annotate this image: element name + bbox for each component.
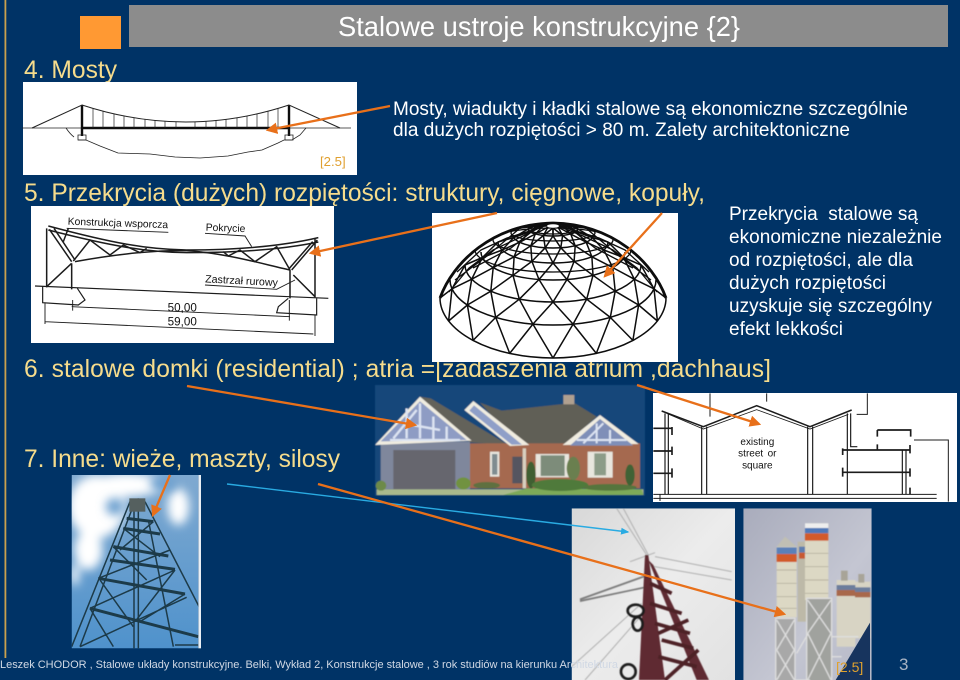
label: 50,00: 50,00 — [168, 301, 197, 314]
house roofs — [420, 395, 597, 446]
dome bracing left — [440, 224, 553, 358]
house walls — [381, 442, 640, 489]
landscaping — [376, 457, 643, 495]
silo: tall centre — [798, 523, 828, 622]
page number: 3 — [899, 655, 908, 674]
label: Konstrukcja wsporcza: Konstrukcja wsporcza — [68, 217, 169, 231]
silo: rear right — [837, 571, 870, 647]
panel: cable-supported roof drawing — [31, 206, 334, 343]
dark corner wedge — [836, 623, 870, 680]
porch and door — [512, 448, 526, 488]
arrow: to silos — [318, 484, 784, 614]
heading: 5. Przekrycia: 5. Przekrycia (dużych) rozpiętości: struktury, cięgnowe, kopuły, — [24, 180, 705, 207]
panel: guyed mast photo — [572, 508, 735, 680]
sky gaps — [106, 475, 177, 515]
text: roof coverings description: od rozpiętości, ale dla — [729, 250, 913, 271]
label: existing street or square: existing — [740, 437, 774, 448]
source tag [2.5]: [2.5] — [836, 659, 863, 675]
atrium roof — [662, 406, 852, 427]
tower lattice — [72, 498, 202, 648]
footer text: Leszek CHODOR , Stalowe układy konstrukcyjne. Belki, Wykład 2, Konstrukcje stalowe , 3 rok studiów na kierunku Architektura — [0, 659, 619, 671]
coiled cables — [628, 605, 644, 617]
dome crown density — [449, 224, 657, 292]
text: bridges description: Mosty, wiadukty i kładki stalowe są ekonomiczne szczególnie — [393, 99, 908, 120]
panel: suspension bridge drawing: [2.5] — [320, 154, 346, 169]
label: existing street or square: square — [742, 461, 773, 472]
text: roof coverings description — [729, 204, 942, 340]
accent square — [80, 16, 121, 49]
text: roof coverings description: ekonomiczne niezależnie — [729, 227, 942, 248]
arrow: to house — [187, 386, 415, 425]
clouds — [68, 473, 189, 586]
title bar: Stalowe ustroje konstrukcyjne {2} — [338, 11, 740, 42]
gable framing — [375, 397, 639, 446]
arrow: text to bridge — [268, 106, 390, 130]
guy cables — [572, 508, 732, 680]
label: 59,00: 59,00 — [168, 315, 197, 328]
text: roof coverings description: efekt lekkości — [729, 319, 843, 340]
text: bridges description — [393, 99, 908, 141]
dome rings — [440, 223, 666, 358]
label: Zastrzał rurowy: Zastrzał rurowy — [205, 273, 279, 289]
panel: suspension bridge drawing — [22, 82, 357, 175]
label: Pokrycie: Pokrycie — [206, 223, 246, 235]
text: bridges description: dla dużych rozpiętości > 80 m. Zalety architektoniczne — [393, 120, 850, 141]
panel: silos photo — [743, 508, 872, 680]
heading: 6. stalowe domki: 6. stalowe domki (residential) ; atria =[zadaszenia atrium ,dachhaus] — [24, 356, 771, 383]
text: roof coverings description: dużych rozpiętości — [729, 273, 886, 294]
arrow: cyan to mast — [227, 484, 628, 532]
arrow: to tower — [153, 475, 170, 515]
heading: 7. Inne: 7. Inne: wieże, maszty, silosy — [24, 446, 341, 473]
text: roof coverings description: uzyskuje się szczególny — [729, 296, 932, 317]
panel: atrium roof section drawing — [653, 393, 957, 502]
arrow: to atrium — [637, 385, 759, 424]
heading: 4. Mosty: 4. Mosty — [24, 57, 118, 84]
windows — [490, 452, 613, 478]
label: existing street or square: street or — [738, 448, 777, 459]
garage door — [393, 450, 455, 489]
panel: lattice tower photo — [68, 473, 202, 648]
text: roof coverings description: Przekrycia stalowe są — [729, 204, 918, 225]
arrow: to cable roof — [311, 213, 497, 253]
silo: front left — [777, 537, 797, 617]
arrow: to dome — [605, 213, 662, 276]
label: existing street or square — [738, 437, 777, 472]
left accent rule — [4, 0, 6, 658]
title bar — [129, 5, 948, 47]
silo support steelwork — [776, 598, 858, 680]
mast legs — [639, 555, 665, 680]
panel: steel-frame house photo — [375, 385, 645, 496]
dome bracing right — [553, 224, 666, 358]
bridge roadway — [22, 127, 351, 129]
panel: geodesic dome drawing — [432, 213, 678, 362]
